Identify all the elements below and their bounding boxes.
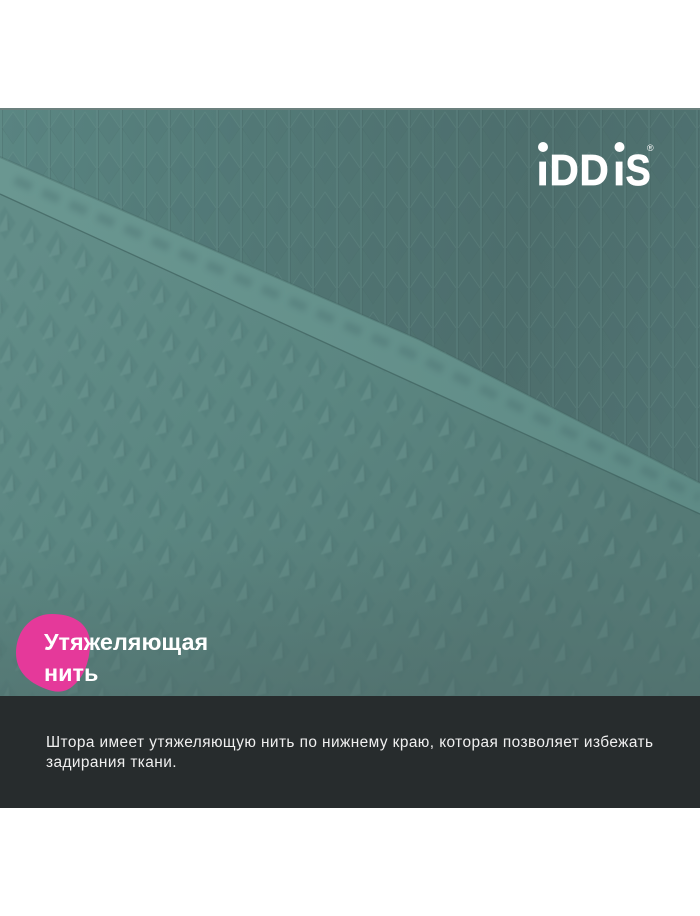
logo: iddis: ® [647, 143, 654, 153]
heading [44, 629, 208, 686]
pink blob [16, 614, 90, 692]
caption text [46, 734, 653, 771]
heading: Утяжеляющая [44, 629, 208, 655]
logo: iddis [536, 142, 654, 192]
upper fabric panel [0, 108, 700, 508]
caption band [0, 696, 700, 808]
caption text: задирания ткани. [46, 754, 177, 771]
panel: fabric photo [0, 108, 700, 696]
caption text: Штора имеет утяжеляющую нить по нижнему краю, которая позволяет избежать [46, 734, 653, 751]
hem band with weighted thread [0, 157, 700, 514]
lower fabric panel [0, 190, 700, 696]
heading: нить [44, 660, 98, 686]
